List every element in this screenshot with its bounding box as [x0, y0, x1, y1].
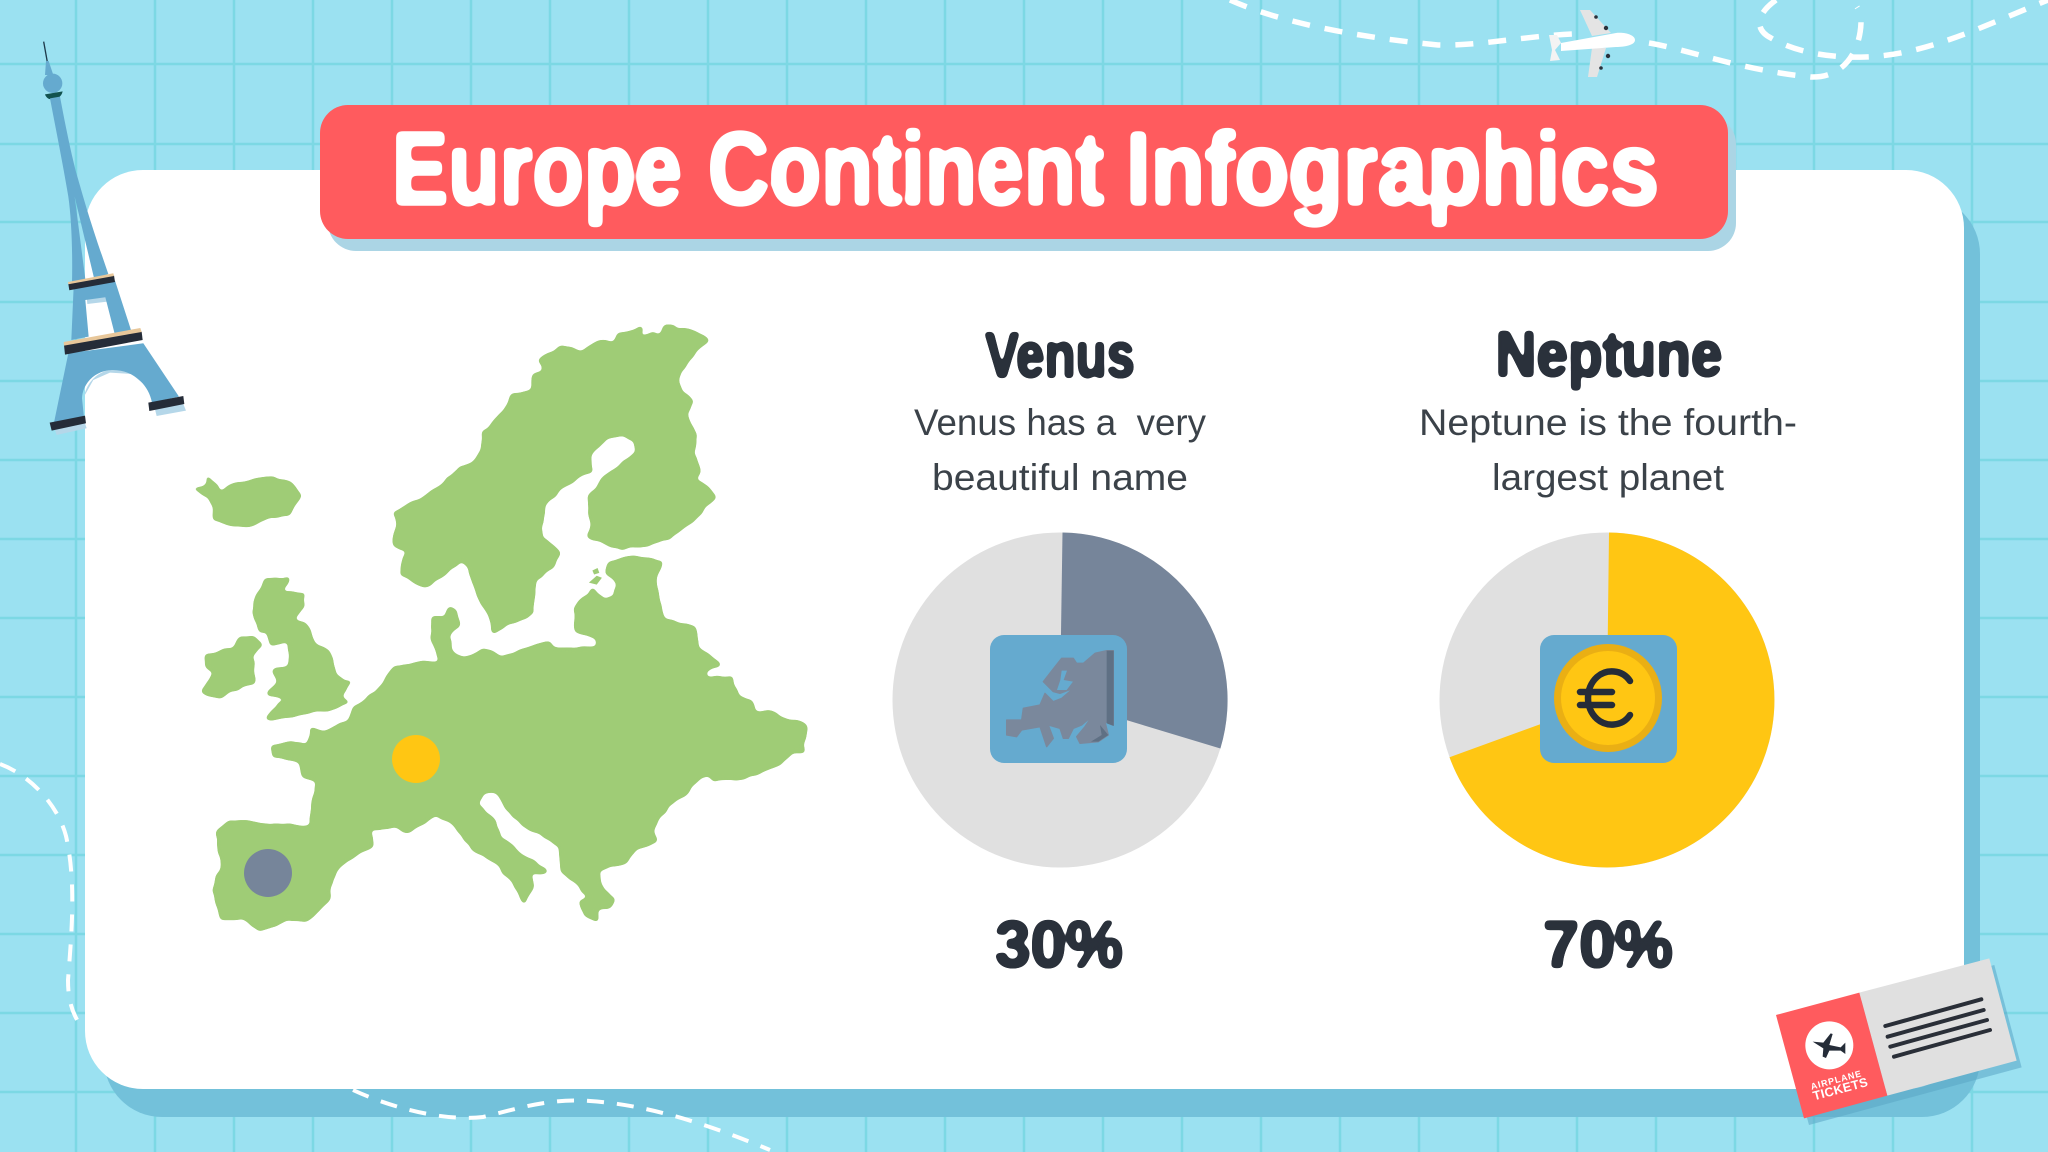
dashed flight path: top right — [1230, 0, 2048, 77]
ticket label: AIRPLANE — [1810, 1068, 1863, 1092]
title banner — [320, 105, 1736, 251]
Venus percentage: 30% — [995, 907, 1123, 981]
icon: Europe map tile — [990, 635, 1127, 763]
Ireland — [202, 637, 261, 698]
title: Europe — [392, 111, 682, 226]
title: Continent — [708, 111, 1104, 226]
title: Infographics — [1126, 111, 1659, 226]
icon: euro coin tile — [1540, 635, 1677, 763]
map of Europe — [193, 326, 805, 931]
map marker: yellow — [392, 735, 440, 783]
Neptune description: Neptune is the fourth- — [1419, 402, 1797, 443]
Baltic islands — [589, 568, 602, 585]
pie chart: Neptune 70% — [1440, 532, 1774, 868]
Neptune description — [1419, 402, 1797, 498]
Venus description: beautiful name — [932, 457, 1188, 498]
Venus description: Venus has a very — [914, 402, 1206, 443]
Venus heading: Venus — [985, 319, 1135, 391]
Neptune percentage: 70% — [1543, 907, 1673, 981]
Great Britain — [254, 578, 352, 720]
pie chart: Venus 30% — [892, 532, 1228, 868]
map marker: slate — [244, 849, 292, 897]
icon: Eiffel Tower — [43, 42, 186, 435]
dashed flight path: bottom — [353, 1090, 770, 1150]
Scandinavia and Finland — [394, 326, 714, 633]
card shadow — [104, 196, 1980, 1117]
icon: airplane — [1549, 10, 1635, 77]
ticket label: TICKETS — [1811, 1075, 1870, 1103]
icon: airplane ticket — [1776, 958, 2022, 1125]
continental Europe — [213, 557, 805, 931]
Iceland — [193, 477, 300, 527]
Neptune description: largest planet — [1492, 457, 1725, 498]
Neptune heading: Neptune — [1496, 318, 1722, 390]
main white card — [85, 170, 1964, 1089]
Venus description — [914, 402, 1206, 498]
dashed flight path: left — [0, 764, 84, 1030]
